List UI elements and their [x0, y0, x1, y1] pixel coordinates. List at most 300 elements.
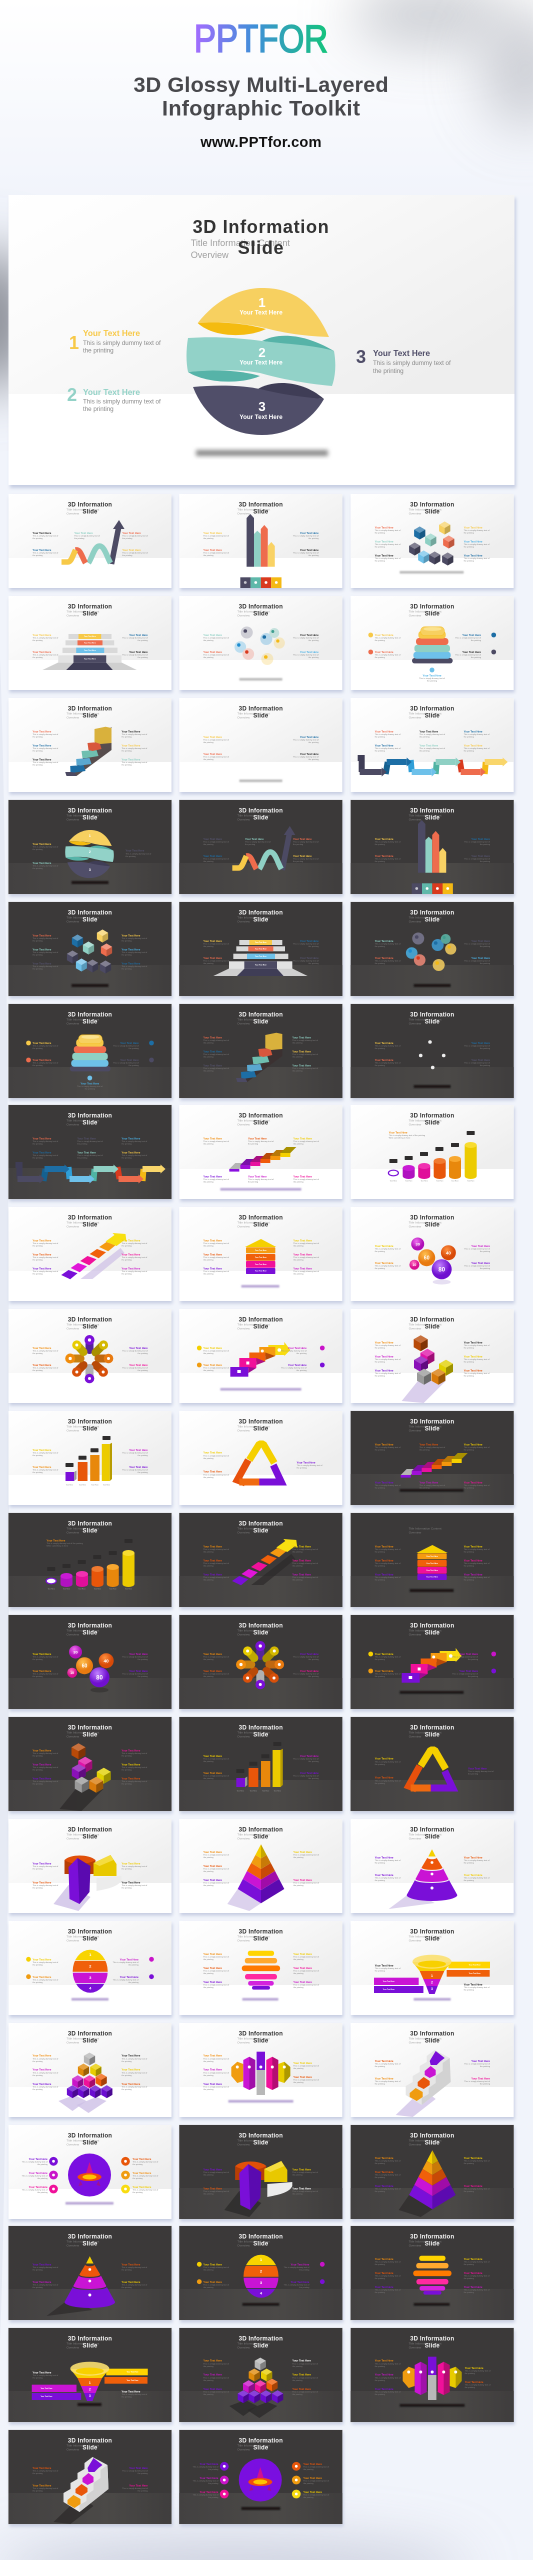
- labels: This is simply dummy text of: [303, 2494, 329, 2497]
- chart: [224, 2161, 292, 2217]
- labels: This is simply dummy text of: [32, 747, 59, 750]
- labels: the printing: [32, 867, 43, 870]
- labels: the printing: [293, 1884, 303, 1887]
- labels: the printing: [375, 639, 385, 642]
- labels: Your Text Here: [203, 634, 222, 637]
- labels: Your Text Here: [292, 1036, 311, 1040]
- labels: Your Text Here: [375, 957, 393, 960]
- title: 3D Information: [239, 2235, 283, 2241]
- labels: Your Text Here: [46, 1539, 65, 1542]
- labels: This is simply dummy text of: [464, 943, 490, 946]
- labels: Your Text Here: [32, 962, 51, 966]
- title: [66, 1420, 112, 1432]
- labels: This is simply dummy text of: [203, 1868, 229, 1871]
- labels: Your Text Here: [203, 1471, 222, 1474]
- labels: This is simply dummy text of: [122, 2284, 148, 2287]
- labels: Your Text Here: [32, 1042, 51, 1045]
- labels: This is simply dummy text of: [464, 1045, 490, 1048]
- labels: the printing: [419, 1449, 430, 1452]
- title: 3D Information: [410, 1828, 454, 1834]
- labels: This is simply dummy text of: [122, 1656, 148, 1659]
- labels: This is simply dummy text of: [293, 1758, 319, 1761]
- labels: This is simply dummy text of: [464, 1248, 490, 1251]
- hero labels: [67, 329, 451, 413]
- title: Title Information Content: [409, 2036, 441, 2040]
- labels: Your Text Here: [129, 1364, 148, 1367]
- labels: Your Text Here: [122, 2069, 140, 2072]
- labels: Your Text Here: [122, 532, 141, 535]
- labels: the printing: [203, 945, 213, 948]
- labels: Your Text Here: [464, 2185, 482, 2188]
- title: [237, 503, 283, 515]
- labels: [203, 2359, 318, 2396]
- labels: Your Text Here: [32, 1976, 51, 1979]
- labels: This is simply dummy text of: [464, 1446, 490, 1449]
- labels: Your Text Here: [32, 1059, 51, 1062]
- labels: the printing: [32, 1964, 43, 1967]
- labels: the printing: [308, 741, 319, 744]
- slide: rising steps, dark: [179, 1004, 343, 1100]
- labels: Your Text Here: [462, 651, 481, 654]
- labels: the printing: [37, 2191, 48, 2194]
- title: Title Information Content: [237, 2342, 270, 2346]
- chart: [412, 820, 453, 894]
- labels: the printing: [375, 1487, 385, 1490]
- labels: the printing: [203, 1760, 213, 1763]
- hero labels: Your Text Here: [373, 349, 430, 358]
- labels: This is simply dummy text of: [375, 1673, 401, 1676]
- title: 3D Information: [239, 1624, 283, 1630]
- labels: Your Text Here: [293, 1851, 312, 1854]
- labels: Your Text Here: [293, 1138, 312, 1140]
- labels: the printing: [293, 1181, 303, 1184]
- chart: [234, 626, 285, 681]
- title: [409, 1420, 454, 1432]
- labels: Your Text Here: [468, 1767, 487, 1770]
- title: [409, 1114, 454, 1126]
- labels: This is simply dummy text of: [122, 2470, 148, 2473]
- title: Overview: [237, 511, 251, 515]
- labels: the printing: [375, 1551, 385, 1554]
- labels: the printing: [203, 2269, 213, 2272]
- title: Overview: [237, 1530, 251, 1534]
- main title: Infographic Toolkit: [162, 96, 360, 120]
- labels: Your Text Here: [464, 2272, 482, 2275]
- labels: the printing: [32, 1259, 43, 1262]
- labels: [32, 1448, 148, 1474]
- slide: funnel, light: [351, 1921, 515, 2018]
- labels: the printing: [375, 1449, 385, 1452]
- labels: the printing: [296, 1352, 307, 1355]
- labels: This is simply dummy text of: [293, 1256, 319, 1259]
- title: [237, 911, 283, 923]
- labels: the printing: [32, 968, 43, 971]
- labels: This is simply dummy text of: [203, 2362, 229, 2365]
- labels: the printing: [375, 1782, 385, 1785]
- title: Overview: [409, 1938, 422, 1942]
- title: Slide: [425, 1732, 440, 1738]
- labels: This is simply dummy text of: [22, 2189, 48, 2192]
- title: Overview: [66, 1224, 80, 1228]
- labels: This is simply dummy text of: [122, 1256, 148, 1259]
- labels: This is simply dummy text of: [464, 858, 490, 861]
- labels: Your Text Here: [471, 1059, 490, 1062]
- labels: the printing: [375, 2190, 385, 2193]
- title: [237, 1828, 283, 1840]
- labels: the printing: [203, 1579, 213, 1582]
- labels: This is simply dummy text of: [293, 637, 319, 640]
- labels: the printing: [203, 1884, 213, 1887]
- labels: Your Text Here: [291, 2281, 309, 2284]
- labels: This is simply dummy text of: [464, 2275, 490, 2278]
- labels: the printing: [292, 2379, 302, 2382]
- labels: the printing: [122, 2395, 132, 2398]
- slide: stepped arrow, light: [179, 1309, 343, 1406]
- labels: This is simply dummy text of: [293, 535, 319, 538]
- labels: Your Text Here: [375, 1560, 393, 1562]
- labels: the printing: [464, 2190, 474, 2193]
- labels: This is simply dummy text of: [32, 552, 59, 555]
- labels: This is simply dummy text of: [32, 1752, 59, 1755]
- hero slide: [8, 195, 516, 488]
- labels: the printing: [138, 2472, 148, 2475]
- hero sphere: Your Text Here: [239, 310, 283, 316]
- title: [66, 1114, 112, 1126]
- slide: stairs, dark: [179, 902, 343, 998]
- labels: This is simply dummy text of: [375, 733, 401, 736]
- labels: Your Text Here: [122, 1268, 140, 1270]
- title: Overview: [237, 2040, 251, 2044]
- labels: This is simply dummy text of: [419, 747, 446, 750]
- chart: [374, 1955, 490, 2001]
- title: Title Information Content: [237, 1322, 270, 1326]
- chart: [358, 758, 508, 776]
- chart: [213, 940, 308, 976]
- labels: the printing: [203, 1273, 213, 1276]
- labels: the printing: [468, 1772, 478, 1775]
- title: Title Information Content: [66, 916, 99, 920]
- labels: [32, 1136, 148, 1160]
- labels: the printing: [208, 2496, 218, 2499]
- labels: Your Text Here: [122, 2390, 140, 2393]
- labels: the printing: [32, 1783, 43, 1786]
- labels: Your Text Here: [291, 2264, 309, 2266]
- labels: the printing: [203, 639, 213, 642]
- title: 3D Information: [410, 1726, 454, 1732]
- labels: Your Text Here: [459, 1670, 478, 1673]
- labels: Your Text Here: [32, 2371, 51, 2374]
- title: Overview: [66, 1938, 80, 1942]
- labels: the printing: [122, 2060, 132, 2063]
- title: Slide: [253, 1324, 269, 1330]
- labels: the printing: [203, 843, 213, 846]
- labels: [375, 633, 482, 683]
- labels: the printing: [308, 962, 319, 965]
- labels: Your Text Here: [203, 1755, 222, 1758]
- title: Overview: [237, 2447, 251, 2451]
- labels: Your Text Here: [32, 1466, 51, 1469]
- slide: cube pyramid, dark: [179, 2328, 343, 2424]
- labels: This is simply dummy text of: [375, 2376, 401, 2379]
- labels: Your Text Here: [300, 549, 319, 552]
- labels: Your Text Here: [122, 1862, 140, 1865]
- labels: This is simply dummy text of: [375, 1562, 401, 1565]
- labels: This is simply dummy text of: [293, 654, 319, 657]
- labels: This is simply dummy text of: [203, 1473, 229, 1476]
- title: Title Information Content: [409, 1526, 441, 1530]
- labels: the printing: [32, 1369, 43, 1372]
- title: Overview: [66, 1122, 80, 1126]
- labels: Your Text Here: [32, 948, 51, 952]
- labels: the printing: [203, 860, 213, 863]
- labels: Your Text Here: [32, 843, 51, 846]
- labels: Your Text Here: [471, 1042, 490, 1045]
- labels: [32, 531, 148, 557]
- labels: This is simply dummy text of: [122, 1766, 148, 1769]
- labels: Your Text Here: [29, 2172, 48, 2175]
- labels: This is simply dummy text of: [375, 637, 401, 640]
- chart: [32, 2362, 148, 2406]
- title: 3D Information: [239, 1420, 283, 1426]
- labels: This is simply dummy text of: [132, 2175, 159, 2178]
- labels: Your Text Here: [32, 1240, 51, 1242]
- labels: Your Text Here: [464, 1342, 482, 1344]
- labels: [375, 2359, 491, 2396]
- labels: This is simply dummy text of: [464, 1986, 490, 1989]
- title: Title Information Content: [237, 1018, 270, 1022]
- title: 3D Information: [239, 2337, 283, 2343]
- labels: This is simply dummy text of: [375, 654, 401, 657]
- title: Overview: [409, 1224, 422, 1228]
- labels: Your Text Here: [375, 2286, 393, 2289]
- labels: Your Text Here: [122, 1152, 140, 1154]
- labels: This is simply dummy text of: [293, 943, 319, 946]
- labels: Your Text Here: [375, 1342, 393, 1344]
- title: [409, 2337, 454, 2349]
- title: Slide: [253, 509, 269, 515]
- labels: the printing: [32, 954, 43, 957]
- labels: Your Text Here: [32, 744, 51, 748]
- labels: the printing: [375, 560, 385, 563]
- labels: the printing: [122, 968, 132, 971]
- labels: Your Text Here: [389, 1131, 407, 1134]
- labels: Your Text Here: [122, 1750, 140, 1752]
- labels: This is simply dummy text of: [122, 1884, 148, 1887]
- hero sphere: 3: [258, 399, 266, 414]
- labels: Your Text Here: [122, 1138, 140, 1140]
- title: Slide: [82, 917, 98, 923]
- labels: the printing: [208, 2482, 218, 2485]
- labels: Your Text Here: [129, 651, 148, 654]
- labels: Your Text Here: [300, 957, 319, 960]
- labels: the printing: [77, 1157, 87, 1160]
- title: Slide: [253, 1936, 269, 1942]
- labels: This is simply dummy text of: [375, 2391, 401, 2394]
- title: 3D Information: [410, 1420, 454, 1426]
- title: Slide: [82, 1222, 98, 1228]
- title: Title Information Content: [237, 1424, 270, 1428]
- labels: This is simply dummy text of: [375, 2188, 401, 2191]
- labels: [375, 837, 491, 863]
- labels: This is simply dummy text of: [203, 654, 229, 657]
- labels: This is simply dummy text of: [464, 1859, 490, 1862]
- labels: This is simply dummy text of: [419, 1484, 446, 1487]
- title: Title Information Content: [66, 2444, 99, 2448]
- labels: the printing: [203, 2060, 213, 2063]
- labels: the printing: [122, 1157, 132, 1160]
- title: [237, 2134, 283, 2146]
- hero labels: Your Text Here: [83, 329, 140, 338]
- labels: Your Text Here: [200, 2463, 218, 2466]
- labels: This is simply dummy text of: [375, 747, 401, 750]
- labels: This is simply dummy text of: [375, 557, 401, 560]
- labels: the printing: [293, 860, 303, 863]
- labels: This is simply dummy text of: [248, 1140, 274, 1143]
- title: 3D Information: [239, 1726, 283, 1732]
- title: Overview: [409, 1122, 422, 1126]
- labels: Your Text Here: [32, 1364, 51, 1367]
- labels: Your Text Here: [375, 1670, 393, 1673]
- labels: Your Text Here: [200, 2477, 218, 2480]
- labels: This is simply dummy text of: [32, 1780, 59, 1783]
- labels: Your Text Here: [32, 1881, 51, 1884]
- labels: Your Text Here: [122, 730, 140, 734]
- chart: [65, 727, 112, 776]
- labels: the printing: [308, 945, 319, 948]
- labels: Your Text Here: [419, 744, 438, 748]
- labels: the printing: [32, 639, 43, 642]
- hero sphere: Your Text Here: [239, 360, 283, 366]
- labels: the printing: [138, 1352, 148, 1355]
- labels: the printing: [203, 1972, 213, 1975]
- labels: This is simply dummy text of: [122, 1752, 148, 1755]
- labels: Your Text Here: [129, 1670, 148, 1673]
- labels: This is simply dummy text of: [113, 1062, 139, 1065]
- chart: [65, 830, 114, 884]
- labels: Your Text Here: [32, 634, 51, 637]
- chart: 2: [89, 850, 91, 854]
- labels: Your Text Here: [203, 1546, 222, 1548]
- title: [409, 1216, 454, 1228]
- labels: Your Text Here: [375, 1262, 393, 1265]
- slide: purple circle, dark: [179, 2430, 343, 2526]
- labels: Your Text Here: [32, 2467, 51, 2470]
- slide: ribbon arrow, dark: [179, 800, 343, 896]
- title: [66, 1726, 112, 1738]
- labels: Your Text Here: [122, 962, 140, 966]
- chart: [16, 1164, 166, 1184]
- labels: the printing: [375, 2083, 385, 2086]
- labels: This is simply dummy text of: [203, 1178, 229, 1181]
- labels: the printing: [32, 2269, 43, 2272]
- labels: the printing: [122, 736, 132, 739]
- title: Title Information Content: [66, 1526, 99, 1530]
- labels: Your Text Here: [462, 634, 481, 637]
- labels: Your Text Here: [203, 2055, 222, 2058]
- labels: This is simply dummy text of: [455, 654, 481, 657]
- labels: [32, 2262, 148, 2289]
- chart: [232, 826, 295, 870]
- title: Overview: [66, 1836, 80, 1840]
- labels: Your Text Here: [129, 1449, 148, 1452]
- labels: Your Text Here: [471, 838, 490, 841]
- slide: pyramid, dark: [350, 2125, 515, 2222]
- title: Slide: [425, 1936, 440, 1942]
- labels: [32, 730, 148, 767]
- labels: the printing: [122, 1783, 132, 1786]
- labels: the printing: [464, 1862, 474, 1865]
- title: Title Information Content: [66, 1424, 99, 1428]
- labels: the printing: [292, 2365, 302, 2368]
- labels: Your Text Here: [375, 1356, 393, 1358]
- hero labels: This is simply dummy text of: [83, 340, 161, 347]
- labels: This is simply dummy text of: [375, 1344, 401, 1347]
- slide: bubbles, light: [179, 596, 343, 692]
- labels: the printing: [203, 1675, 213, 1678]
- labels: [32, 934, 148, 971]
- labels: the printing: [292, 1056, 302, 1059]
- slide: column bars, dark: [179, 1717, 343, 1814]
- title: Overview: [66, 2447, 80, 2451]
- labels: Your Text Here: [203, 2083, 222, 2086]
- labels: Your Text Here: [203, 1865, 222, 1868]
- title: Title Information Content: [66, 1118, 99, 1122]
- title: Overview: [237, 1632, 251, 1636]
- labels: Your Text Here: [423, 674, 441, 678]
- labels: This is simply dummy text of: [203, 2057, 229, 2060]
- labels: the printing: [375, 750, 385, 753]
- chart: [240, 514, 282, 588]
- labels: the printing: [203, 1181, 213, 1184]
- labels: This is simply dummy text of: [375, 960, 401, 963]
- hero sphere shadow: [196, 450, 328, 456]
- labels: the printing: [303, 2496, 313, 2499]
- labels: This is simply dummy text of: [132, 2189, 159, 2192]
- labels: [375, 1652, 479, 1678]
- title: Overview: [409, 2142, 422, 2146]
- labels: the printing: [122, 2286, 132, 2289]
- labels: the printing: [122, 1886, 132, 1889]
- labels: Your Text Here: [129, 634, 148, 637]
- chart: 3: [89, 868, 91, 872]
- chart: [60, 1743, 111, 1811]
- labels: the printing: [203, 2088, 213, 2091]
- slide: gradient steps, light: [179, 1105, 343, 1202]
- slide: stairs, light: [8, 596, 172, 692]
- title: Overview: [237, 1734, 251, 1738]
- labels: This is simply dummy text of: [203, 841, 229, 844]
- labels: This is simply dummy text of: [22, 2161, 48, 2164]
- labels: This is simply dummy text of: [203, 2266, 229, 2269]
- labels: the printing: [203, 758, 213, 761]
- labels: Your Text Here: [32, 2484, 51, 2488]
- title: [237, 1930, 283, 1942]
- labels: This is simply dummy text of: [203, 1367, 229, 1370]
- labels: [32, 1958, 139, 1984]
- title: Overview: [237, 1224, 251, 1228]
- title: Overview: [237, 715, 251, 719]
- title: Title Information Content: [66, 1322, 99, 1326]
- chart: [54, 1855, 122, 1911]
- labels: This is simply dummy text of: [203, 1984, 229, 1987]
- labels: the printing: [248, 1181, 258, 1184]
- labels: the printing: [122, 2074, 132, 2077]
- labels: This is simply dummy text of: [122, 535, 148, 538]
- labels: This is simply dummy text of: [32, 761, 59, 764]
- title: Overview: [66, 1632, 80, 1636]
- chart: [62, 520, 124, 564]
- labels: Your Text Here: [203, 2281, 222, 2284]
